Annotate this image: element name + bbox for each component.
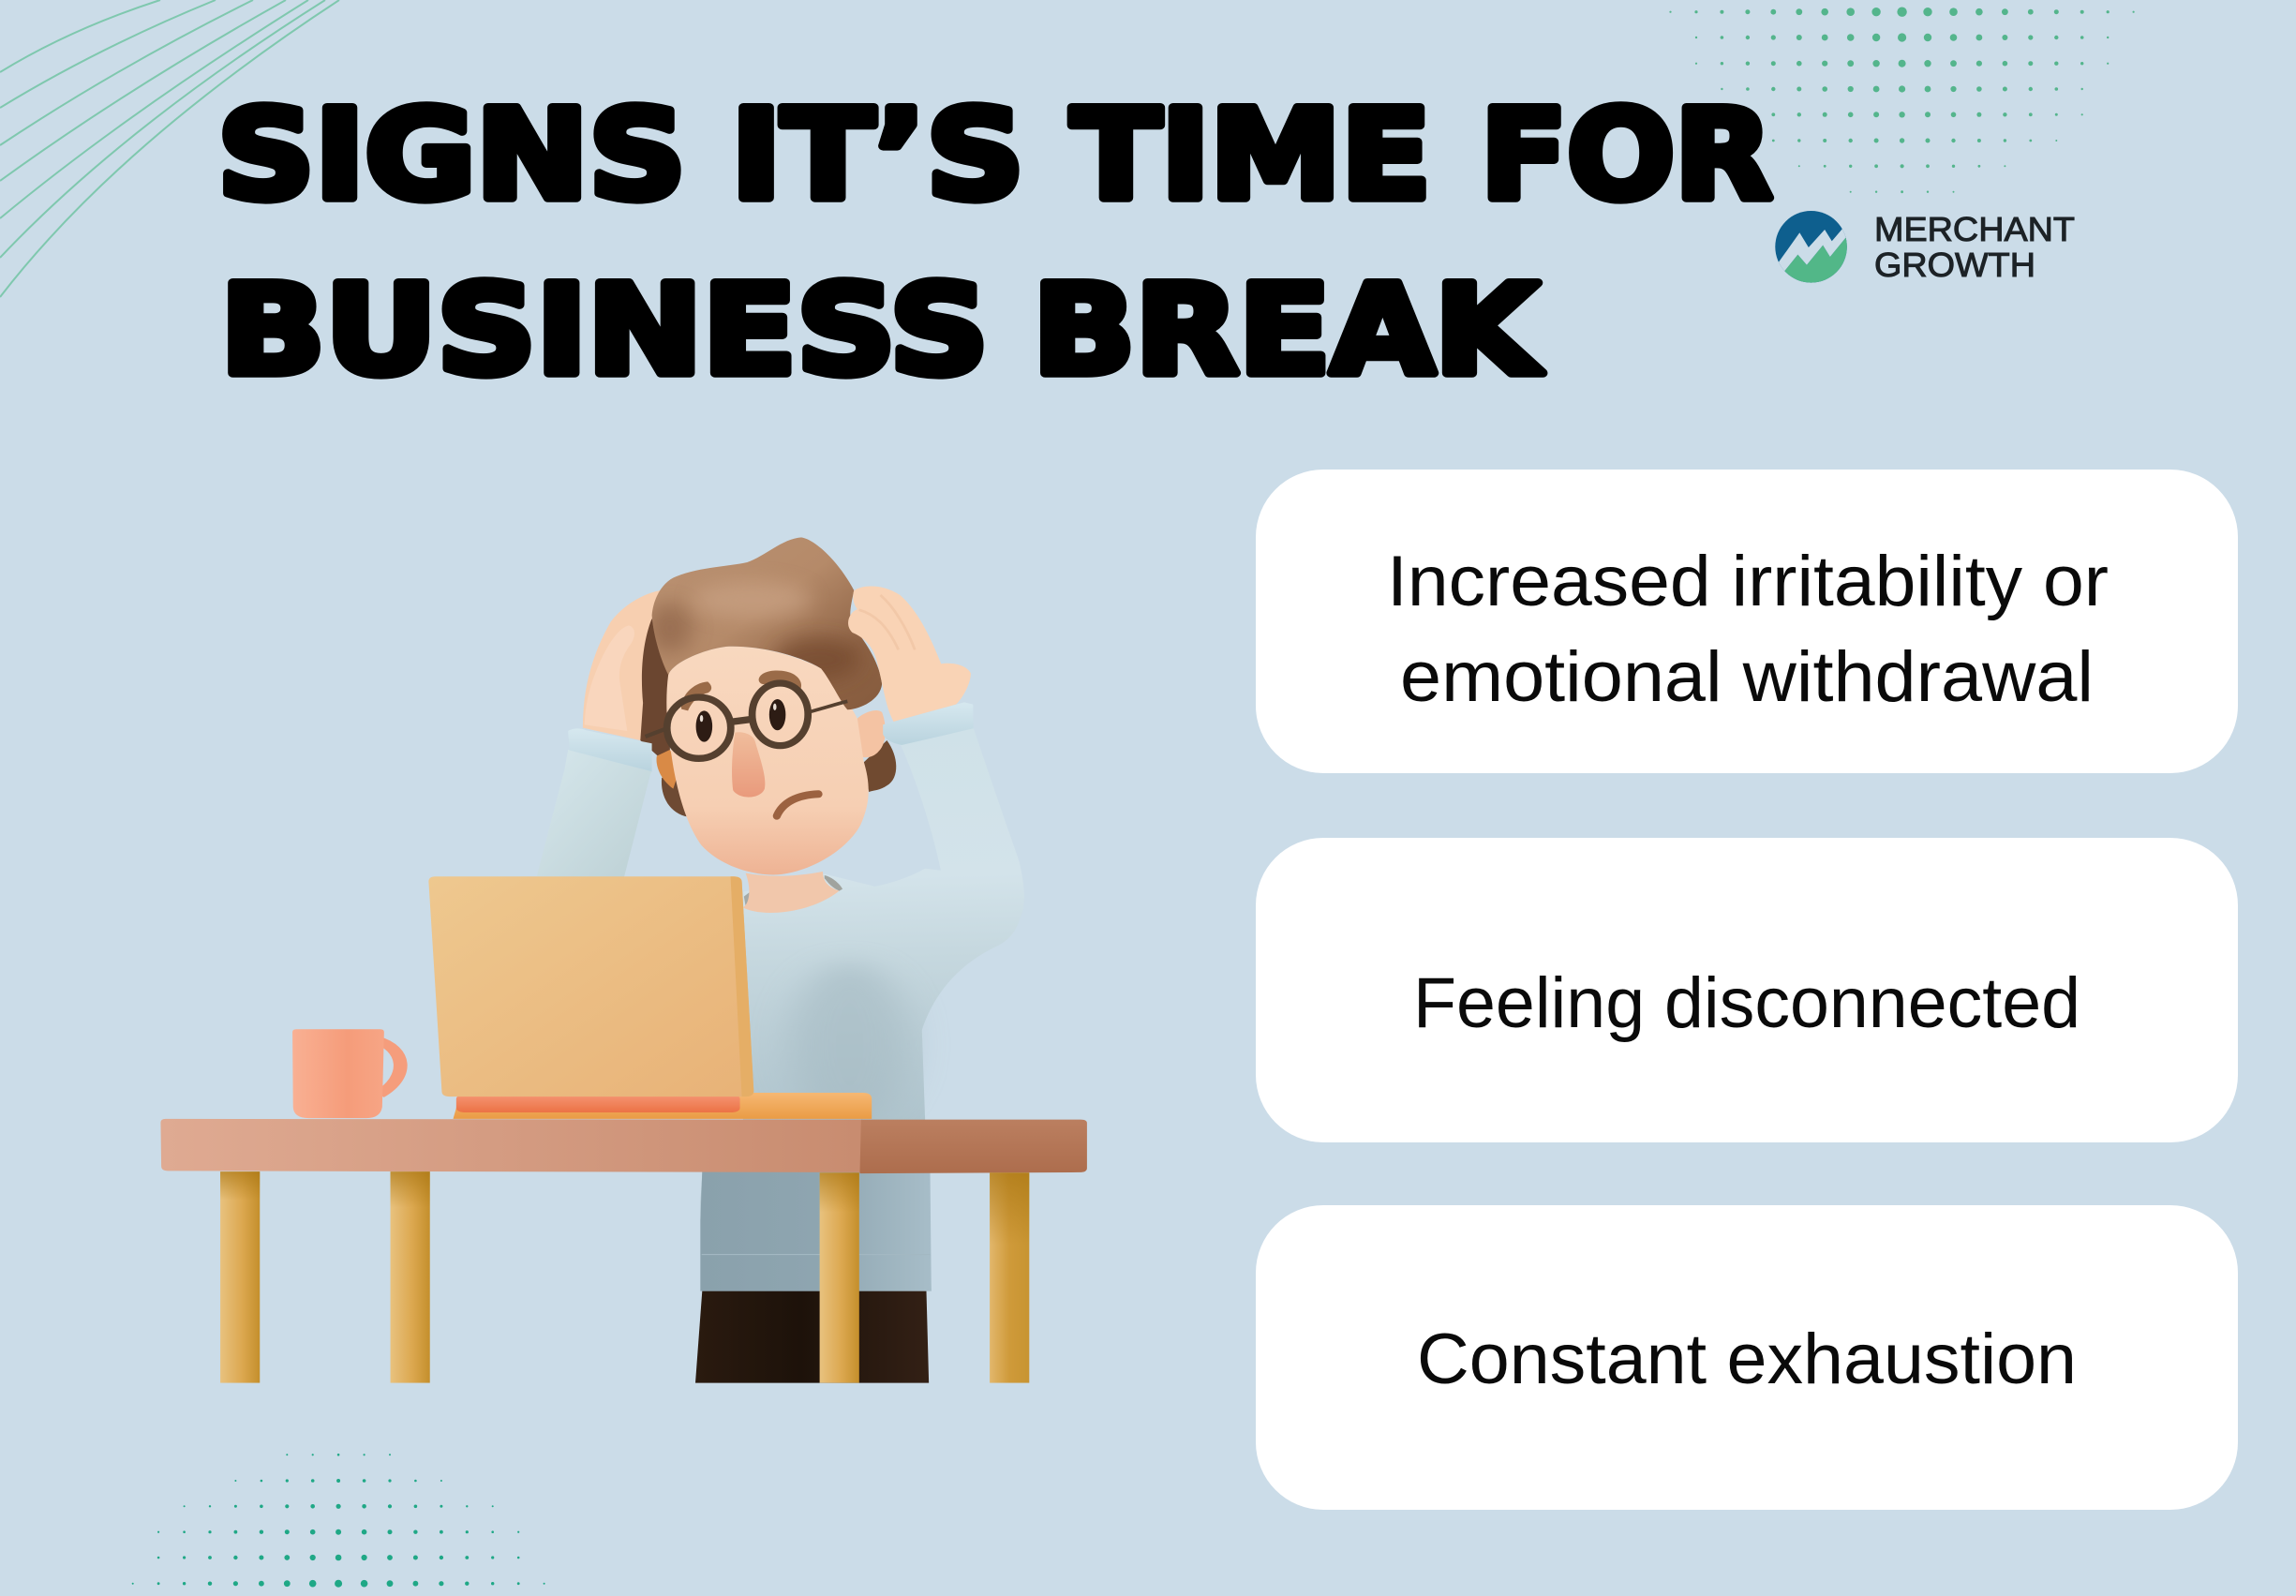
- decorative dot grid, bottom left: [132, 1454, 545, 1588]
- right hand: [848, 586, 971, 722]
- sweater shading: [790, 962, 909, 1126]
- text: card three: Constant exhaustion: [1417, 1320, 2077, 1399]
- laptop base: [454, 1093, 872, 1119]
- desk side: [859, 1120, 1087, 1173]
- decorative dot grid, top right: [1669, 7, 2135, 193]
- hair: [647, 534, 887, 712]
- head, hair, arms and hands: [537, 534, 974, 913]
- desk legs: [220, 1171, 260, 1383]
- text: card one: Increased irritability or: [1387, 542, 2109, 621]
- right cuff: [883, 702, 974, 745]
- neck: [743, 872, 840, 913]
- trousers: [695, 1290, 929, 1383]
- right hand fingers: [859, 595, 915, 649]
- decorative curved lines, top left: [0, 0, 339, 297]
- sweater hem line: [702, 1253, 930, 1256]
- collar right: [825, 875, 842, 891]
- eyes: [696, 699, 785, 742]
- panel: increased irritability: [1256, 470, 2238, 773]
- desk, laptop and mug: [160, 876, 1087, 1383]
- left forearm: [537, 750, 652, 878]
- panel: constant exhaustion: [1256, 1205, 2238, 1510]
- logo wordmark: GROWTH: [1874, 246, 2035, 284]
- left hand finger: [585, 625, 634, 731]
- title: BUSINESS: [220, 259, 989, 403]
- mug: [292, 1029, 384, 1118]
- text: card one: [1387, 542, 2109, 717]
- text: card one: emotional withdrawal: [1400, 637, 2094, 717]
- title: FOR: [1481, 83, 1772, 228]
- illustration: stressed person at desk: [160, 534, 1087, 1383]
- panel: feeling disconnected: [1256, 838, 2238, 1142]
- mouth: [777, 794, 818, 816]
- leg shadows: [220, 1171, 260, 1201]
- person body and sweater: [695, 728, 1024, 1383]
- sweater: [700, 728, 1024, 1291]
- desk front: [160, 1119, 862, 1172]
- mug handle: [376, 1040, 400, 1095]
- logo: Merchant Growth: [1773, 209, 2075, 284]
- sweater hem under desk: [700, 1170, 932, 1291]
- title: IT’S: [731, 83, 1024, 228]
- laptop hinge: [456, 1095, 740, 1112]
- title: [217, 83, 1772, 403]
- ear: [857, 710, 886, 757]
- face: [666, 647, 869, 874]
- title: SIGNS: [217, 83, 686, 228]
- left cuff: [568, 728, 652, 771]
- hair shadow beside left hand: [640, 619, 670, 767]
- collar left: [744, 884, 764, 906]
- left hand: [583, 590, 660, 743]
- text: card two: Feeling disconnected: [1413, 963, 2080, 1043]
- laptop lid: [428, 876, 753, 1096]
- glasses: [646, 683, 847, 758]
- title: BREAK: [1033, 259, 1543, 403]
- logo wordmark: [1874, 210, 2075, 284]
- eyebrows: [681, 681, 711, 710]
- back hair: [662, 771, 699, 817]
- logo wordmark: MERCHANT: [1874, 210, 2075, 248]
- icon: logo mark: [1773, 209, 1850, 284]
- nose: [732, 732, 765, 798]
- title: TIME: [1071, 83, 1431, 228]
